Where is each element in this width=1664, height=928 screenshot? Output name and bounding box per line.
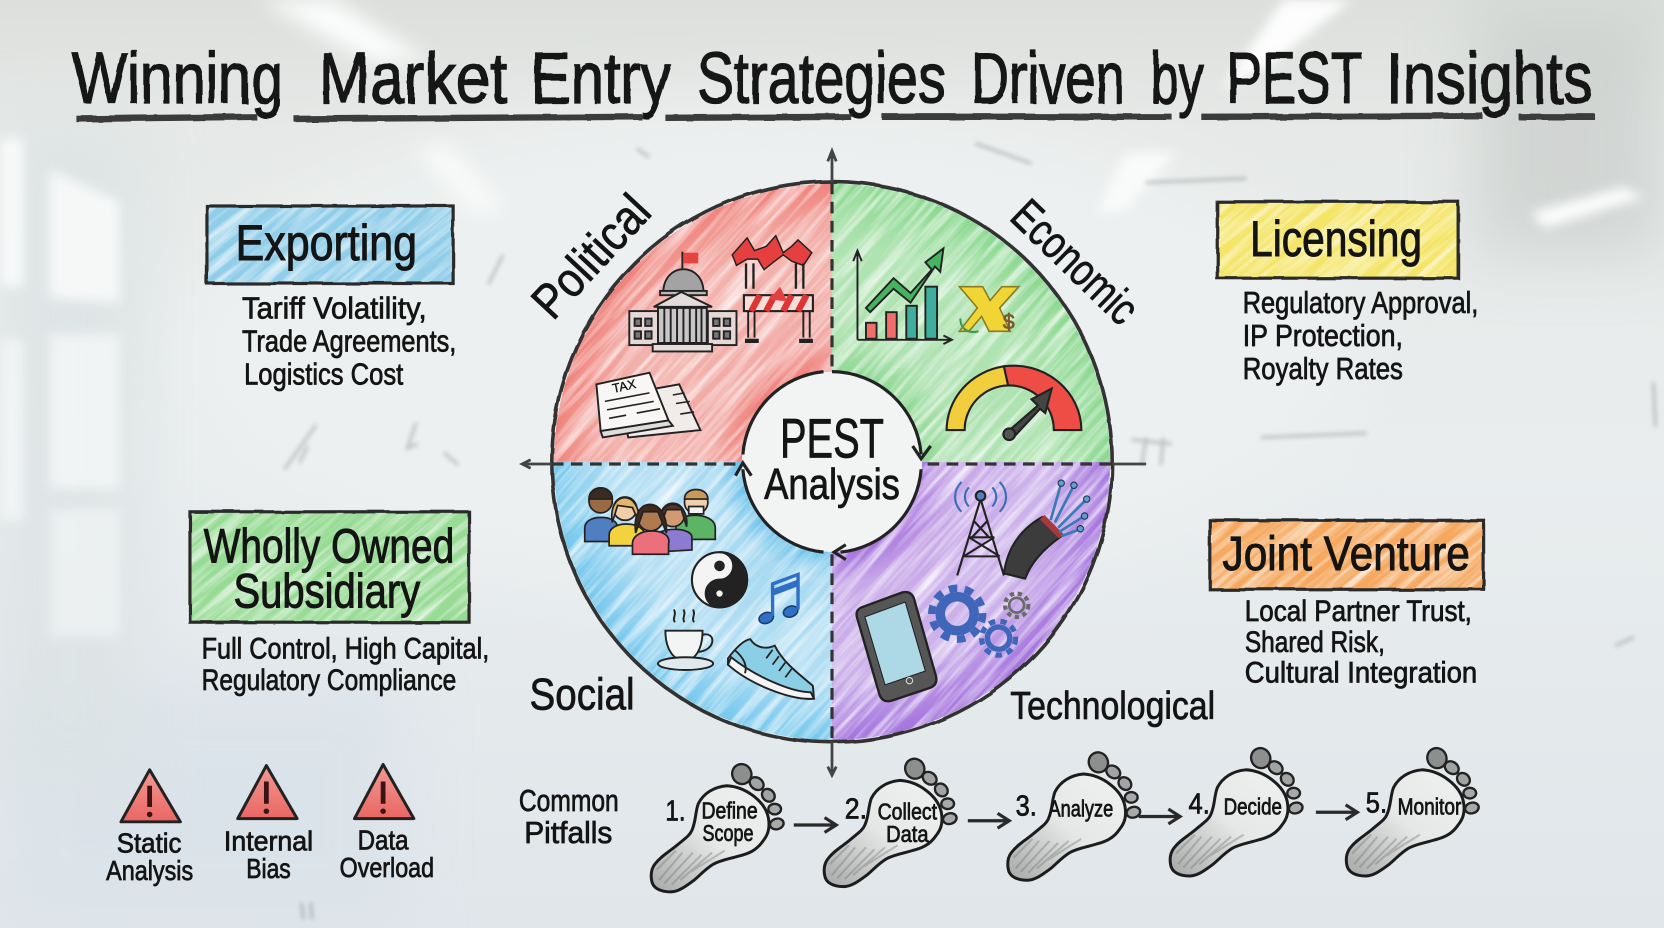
icon: diverse people: [585, 488, 715, 554]
step 1: Define: [701, 798, 758, 824]
icon: currency symbol: [959, 287, 1019, 334]
panel: Exporting: [204, 203, 456, 392]
quadrant: economic: [832, 184, 1110, 462]
label: Technological: Technological: [1010, 684, 1215, 728]
Joint Venture heading: Joint Venture: [1223, 528, 1470, 581]
Joint Venture details: Cultural Integration: [1245, 657, 1477, 690]
Licensing heading: Licensing: [1250, 211, 1422, 267]
Subsidiary box: [188, 509, 472, 625]
step 3: [1008, 749, 1141, 880]
Exporting box: [204, 203, 456, 286]
panel: warnings: [106, 764, 434, 886]
panel: Joint Venture: [1208, 518, 1486, 689]
title: Market: [318, 39, 507, 119]
icon: trade barriers: [732, 236, 813, 341]
title: Strategies: [697, 39, 946, 119]
step 3: 3.: [1016, 790, 1037, 822]
step 1: Scope: [703, 820, 753, 846]
step 2: Data: [886, 821, 929, 847]
icon: tax documents: TAX: [611, 376, 638, 396]
arrow 4 to 5: [1316, 805, 1357, 820]
icon: tax documents: [596, 373, 700, 437]
quadrant: social: [554, 462, 832, 740]
title: Entry: [531, 39, 671, 119]
Subsidiary heading: Subsidiary: [233, 565, 420, 618]
Exporting details: Trade Agreements,: [242, 323, 456, 358]
axis: vertical: [828, 151, 836, 775]
dashed dividers: [552, 183, 1112, 741]
step 5: Monitor: [1398, 793, 1461, 819]
title: PEST: [1227, 39, 1363, 119]
arrow 2 to 3: [968, 813, 1009, 828]
Subsidiary heading: [204, 521, 454, 618]
Licensing box: [1215, 200, 1460, 280]
warning: Static Analysis: Analysis: [106, 855, 193, 886]
icon: government building: [629, 252, 736, 351]
icon: risk gauge: [947, 366, 1081, 440]
icon: signal tower: [955, 482, 1006, 575]
quadrant: technological: [832, 462, 1110, 740]
step 3: Analyze: [1048, 796, 1113, 822]
step 2: 2.: [845, 794, 867, 826]
label: Economic: Economic: [1001, 189, 1149, 334]
center label: PEST: [780, 408, 884, 470]
Licensing details: Regulatory Approval,: [1243, 285, 1478, 320]
Subsidiary details: [202, 632, 489, 697]
title underline: [76, 116, 1595, 119]
icon: yin yang: [692, 552, 747, 607]
warning: Static Analysis: [106, 770, 193, 886]
label: Political: Political: [521, 184, 662, 329]
step 5: 5.: [1366, 787, 1387, 819]
Subsidiary details: Full Control, High Capital,: [202, 632, 489, 665]
center circle: Analysis: [764, 461, 900, 509]
step 2: Collect: [878, 799, 937, 825]
step 4: 4.: [1189, 788, 1210, 820]
Joint Venture box: [1208, 518, 1486, 592]
Exporting details: Logistics Cost: [244, 356, 404, 391]
warning: Data Overload: [340, 764, 434, 883]
Exporting heading: Exporting: [236, 215, 417, 271]
heading: Common Pitfalls: [519, 783, 619, 850]
icon: currency symbol: $: [1003, 311, 1015, 334]
icon: smartphone: [857, 592, 936, 701]
step 5: [1346, 745, 1480, 876]
icon: coffee cup: [658, 609, 713, 670]
center circle: [735, 372, 931, 560]
chart: PEST wheel: [519, 147, 1214, 778]
wheel outline: [552, 182, 1112, 742]
step 2: [824, 756, 958, 887]
title: [72, 39, 1595, 119]
Joint Venture details: [1245, 595, 1477, 690]
crayon texture: [554, 184, 1110, 740]
warning: Data Overload: Overload: [340, 852, 434, 883]
step 4: [1170, 745, 1304, 876]
icon: music note: [757, 574, 799, 625]
warning: Internal Bias: Bias: [246, 853, 291, 884]
process: five footprint steps: [651, 745, 1480, 892]
Exporting details: Tariff Volatility,: [242, 291, 427, 326]
icon: gears: [932, 588, 1028, 655]
warning: Internal Bias: Internal: [224, 825, 313, 856]
title: Insights: [1386, 39, 1593, 119]
panel: Licensing: [1215, 200, 1476, 386]
panel: Wholly Owned Subsidiary: [188, 509, 488, 696]
Licensing details: [1243, 285, 1478, 386]
warning: Static Analysis: Static: [117, 828, 182, 859]
title: Driven: [971, 39, 1125, 119]
Subsidiary heading: Wholly Owned: [204, 521, 454, 574]
Exporting details: [242, 291, 456, 391]
heading: Common Pitfalls: Pitfalls: [524, 815, 612, 850]
warning: Data Overload: Data: [358, 824, 409, 855]
title: by: [1150, 39, 1203, 119]
warning: Internal Bias: [224, 766, 313, 884]
step 1: [651, 761, 785, 892]
icon: sneaker: [728, 639, 814, 699]
quadrant: political: [554, 184, 832, 462]
step 1: 1.: [665, 796, 686, 828]
heading: Common Pitfalls: Common: [519, 783, 619, 818]
label: Social: Social: [530, 670, 635, 719]
Subsidiary details: Regulatory Compliance: [202, 664, 456, 697]
Licensing details: IP Protection,: [1243, 318, 1403, 353]
axis: horizontal: [522, 460, 1146, 468]
arrow 3 to 4: [1139, 809, 1180, 824]
cycle arrows: [735, 446, 931, 560]
Licensing details: Royalty Rates: [1243, 351, 1403, 386]
Joint Venture details: Shared Risk,: [1245, 626, 1385, 659]
title: Winning: [72, 39, 283, 119]
arrow 1 to 2: [794, 818, 836, 832]
icon: growth chart: [853, 248, 952, 344]
Joint Venture details: Local Partner Trust,: [1245, 595, 1472, 628]
step 4: Decide: [1224, 793, 1282, 819]
icon: fiber optic cable: [1004, 480, 1090, 579]
